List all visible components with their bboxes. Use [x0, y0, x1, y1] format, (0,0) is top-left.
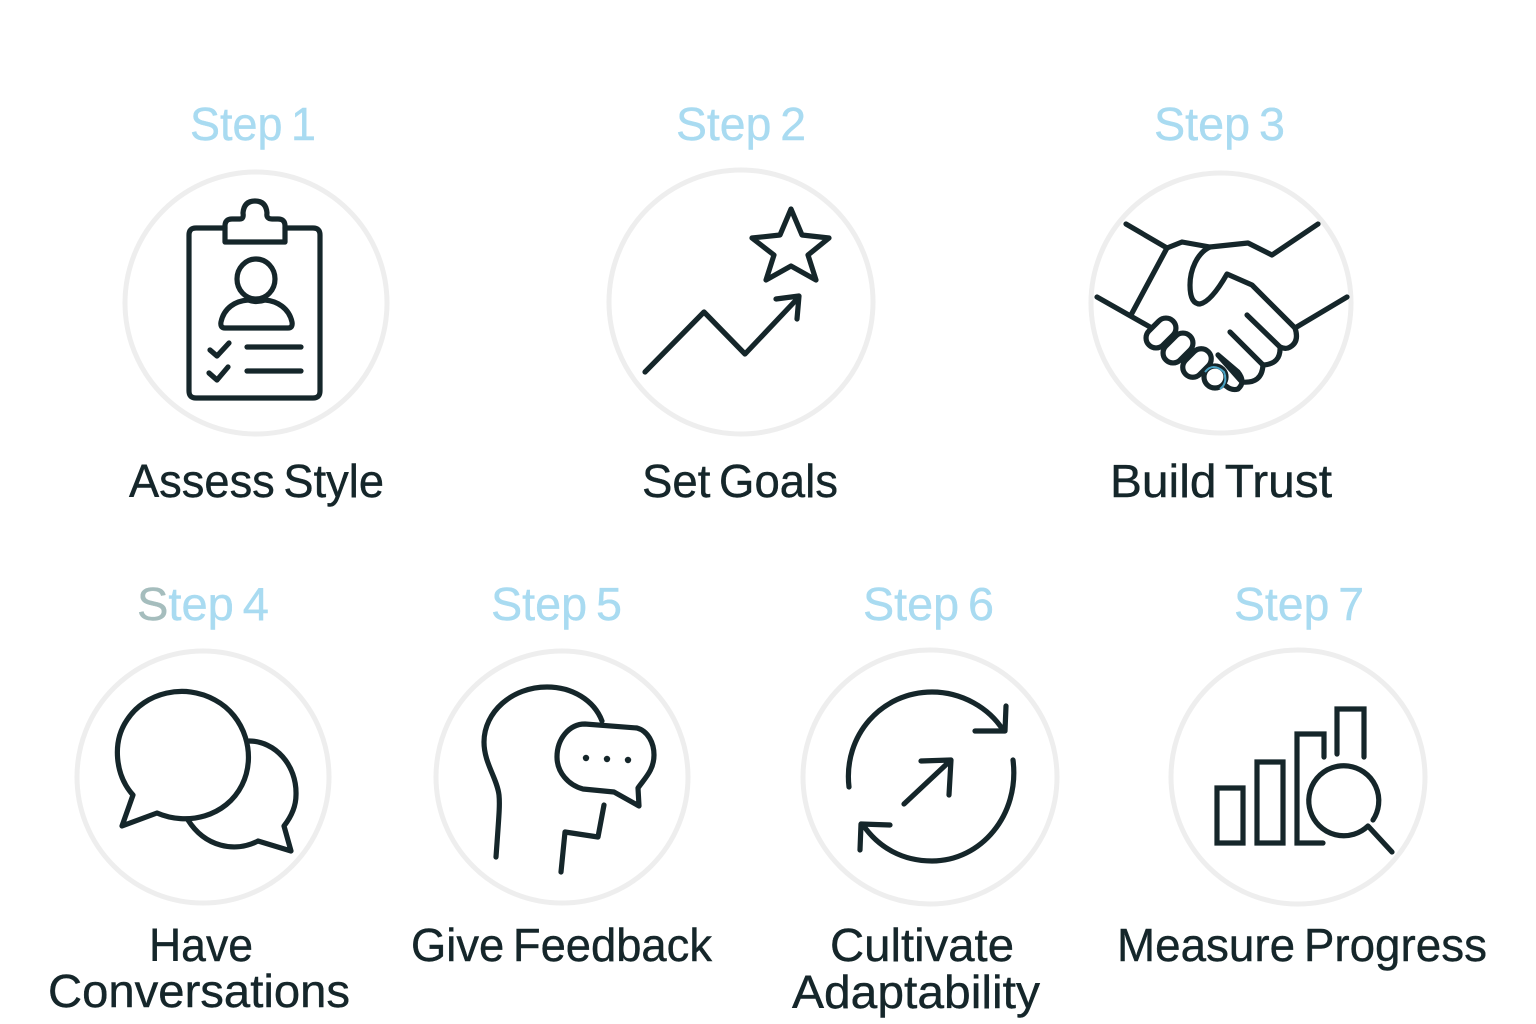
step 7 circle	[1171, 650, 1425, 904]
icon: head with speech bubble	[484, 687, 654, 872]
step 5 label: Step 5	[491, 578, 622, 630]
step 3: build trust	[1091, 98, 1351, 507]
step 6 circle	[803, 650, 1057, 904]
step 5: give feedback	[411, 578, 713, 971]
step 4 label: Step 4	[137, 578, 269, 630]
step 6 label: Step 6	[863, 578, 994, 630]
icon: cycle arrows with diagonal arrow	[848, 692, 1014, 861]
icon: rising arrow with star	[645, 209, 829, 372]
icon: bars with magnifier	[1217, 709, 1392, 852]
step 2: set goals	[609, 98, 873, 507]
step 5 circle	[436, 651, 688, 903]
step 6 title: Adaptability	[792, 966, 1040, 1018]
step 2 circle	[609, 170, 873, 434]
icon: speech bubbles	[117, 691, 296, 851]
step 4: have conversations	[48, 578, 350, 1017]
step 5 title: Give Feedback	[411, 919, 713, 971]
step 3 label: Step 3	[1154, 98, 1285, 150]
step 6 title	[792, 919, 1040, 1018]
step 4 title	[48, 919, 350, 1017]
step 2 title: Set Goals	[642, 455, 838, 507]
step 1 title: Assess Style	[129, 455, 384, 507]
step 7 label: Step 7	[1234, 578, 1364, 630]
step 6 title: Cultivate	[830, 919, 1014, 971]
step 4 title: Conversations	[48, 965, 350, 1017]
icon: handshake	[1097, 224, 1347, 390]
step 1 circle	[125, 172, 387, 434]
step 2 label: Step 2	[676, 98, 806, 150]
handshake blue highlight	[1205, 367, 1225, 389]
step 6: cultivate adaptability	[792, 578, 1057, 1018]
step 4 title: Have	[149, 919, 253, 971]
step 3 title: Build Trust	[1110, 455, 1332, 507]
bubble dots	[583, 755, 631, 763]
step 7 title: Measure Progress	[1117, 919, 1487, 971]
icon: clipboard with profile	[189, 201, 320, 398]
step 1 label: Step 1	[190, 98, 316, 150]
step 3 circle	[1091, 173, 1351, 433]
step 7: measure progress	[1117, 578, 1487, 971]
step 1: assess style	[125, 98, 387, 507]
step 4 circle	[77, 651, 329, 903]
